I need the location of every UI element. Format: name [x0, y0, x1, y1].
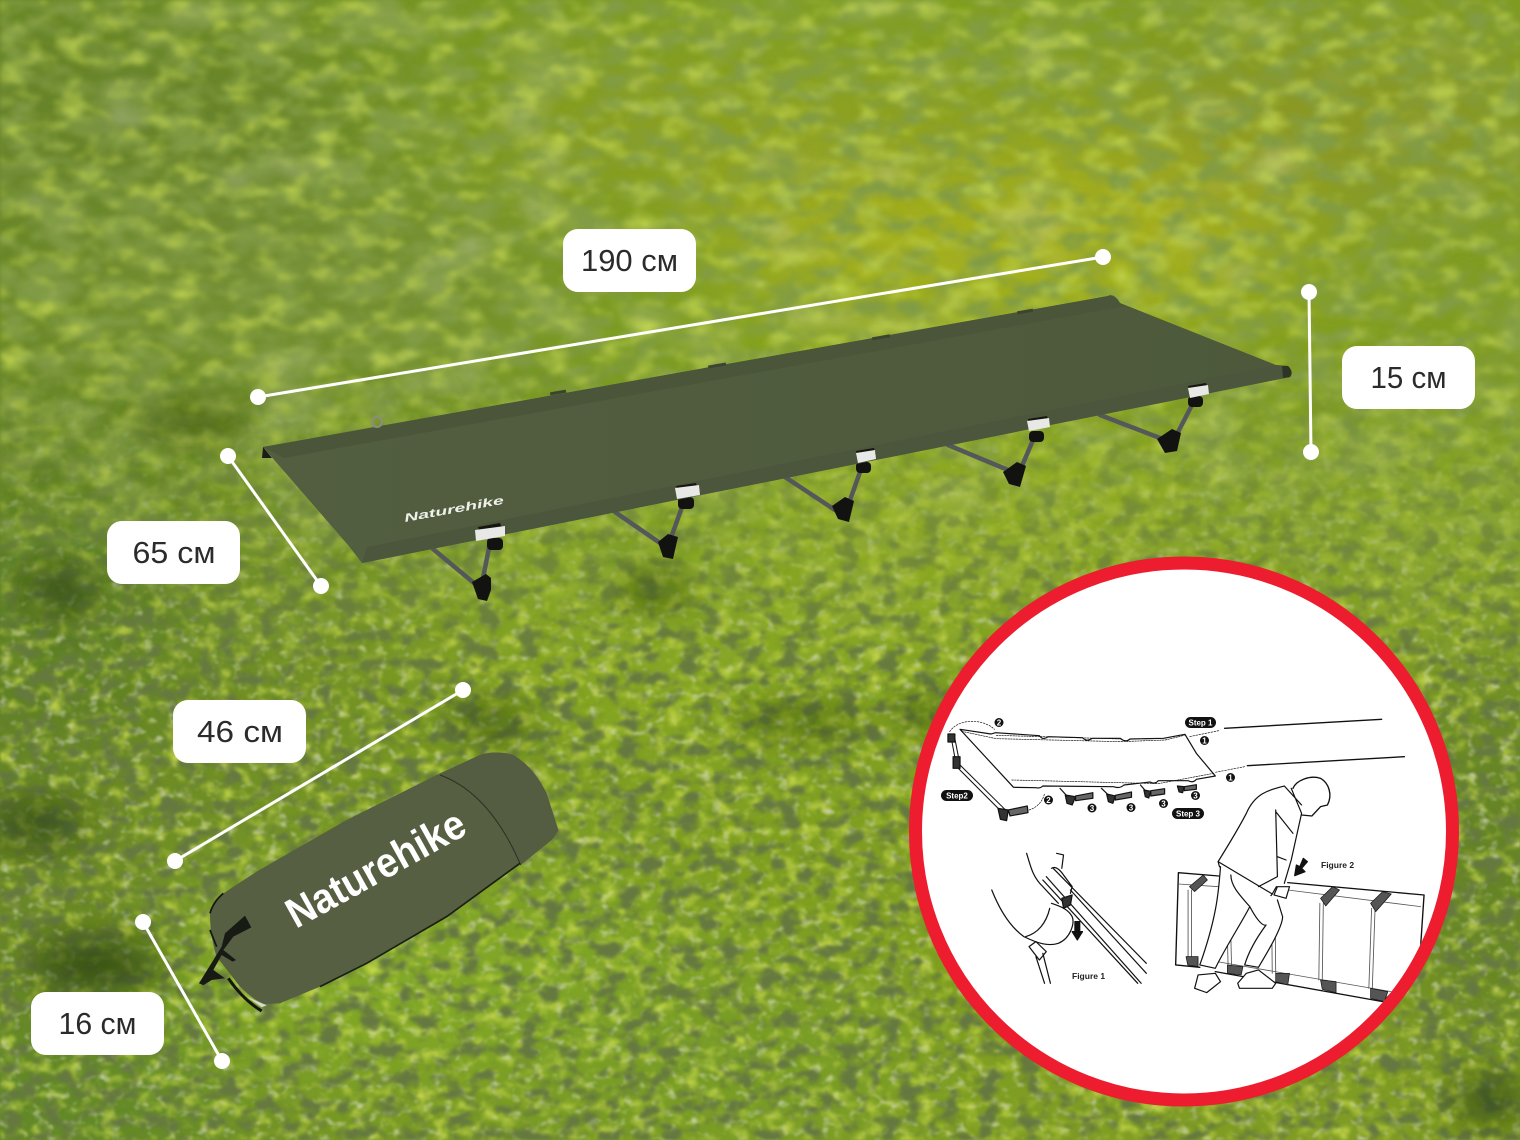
dimension: cot length 190 cm — [250, 229, 1111, 405]
dimension: bag diameter 16 cm — [31, 914, 230, 1069]
figure captions: Figure 1 — [1072, 971, 1105, 981]
cot legs — [433, 396, 1203, 601]
step numbers: 3 — [1161, 800, 1166, 808]
dimension: cot height 15 cm: 15 см — [1370, 360, 1446, 395]
cot logo text: Naturehike — [403, 495, 506, 525]
step numbers: 1 — [1202, 736, 1207, 746]
step labels: Step 3 — [1176, 810, 1201, 818]
step numbers: 2 — [997, 718, 1002, 728]
dimension: cot height 15 cm — [1301, 284, 1475, 460]
dimension: bag length 46 cm — [167, 682, 471, 869]
step numbers — [994, 718, 1235, 813]
cot clips — [475, 383, 1209, 541]
illustration: figure 1 hand and latch — [992, 853, 1146, 983]
figure captions: Figure 2 — [1321, 860, 1354, 870]
dimension: cot width 65 cm — [107, 448, 329, 594]
step labels — [941, 717, 1216, 819]
bag logo text: Naturehike — [278, 800, 474, 937]
step numbers: 3 — [1129, 804, 1134, 812]
dimension: cot width 65 cm: 65 см — [132, 535, 216, 570]
illustration: figure 2 person folding cot — [1176, 777, 1424, 1002]
product: packed carry bag — [199, 752, 558, 1011]
step labels: Step2 — [946, 792, 968, 800]
assembly instructions circle — [916, 563, 1452, 1100]
dimension: bag length 46 cm: 46 см — [197, 714, 283, 749]
step numbers: 2 — [1046, 796, 1051, 805]
product: folding cot — [262, 295, 1292, 601]
figure captions — [1072, 860, 1354, 981]
dimension: bag diameter 16 cm: 16 см — [58, 1006, 136, 1041]
illustration: cot assembly steps — [948, 719, 1404, 821]
dimension: cot length 190 cm: 190 см — [581, 243, 678, 278]
step numbers: 3 — [1193, 792, 1198, 800]
cot fabric — [263, 295, 1292, 563]
step numbers: 3 — [1090, 804, 1095, 813]
step labels: Step 1 — [1188, 718, 1213, 728]
step numbers: 1 — [1228, 774, 1233, 782]
cot ring — [372, 417, 382, 427]
